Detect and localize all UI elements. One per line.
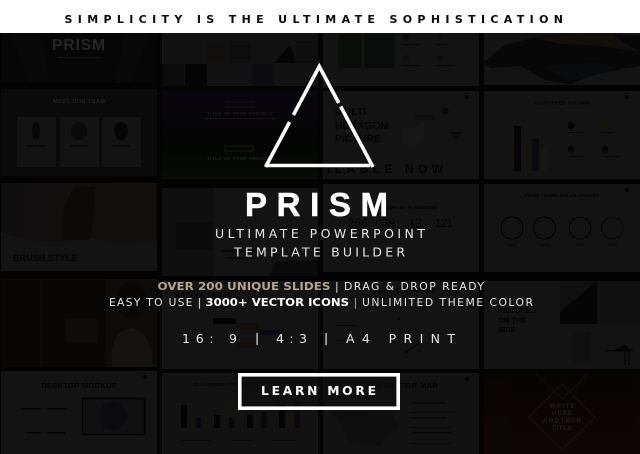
slide: matrix table xyxy=(162,281,318,369)
format options: 4:3 xyxy=(276,331,307,346)
slide: diamond title: HERE xyxy=(552,411,572,417)
slide: four years sales report: 2013 xyxy=(508,242,517,247)
slide: diamond title xyxy=(484,373,640,454)
slide: diamond title: TITLE xyxy=(552,426,572,432)
feature line 1 xyxy=(158,280,484,293)
slide: multi hexagon picture: PICTURE xyxy=(335,133,381,145)
slide: portrait photo xyxy=(1,279,157,367)
button: learn more: LEARN MORE xyxy=(261,384,376,398)
slide: multi hexagon picture: ILABLE NOW xyxy=(327,162,444,176)
feature line 1: OVER 200 UNIQUE SLIDES xyxy=(158,280,330,293)
slide: multi hexagon picture xyxy=(323,91,479,179)
slide: numbers xyxy=(323,184,479,272)
slide: matrix table: MATRIX TABLE xyxy=(174,292,233,299)
slide: pictures on the side: SIDE xyxy=(498,325,516,334)
slide: clustered column infographic: CLUSTERED COLUMN INFOGRAPHIC xyxy=(194,382,287,388)
slide: usa vector map: USA VECTOR MAP xyxy=(364,381,438,390)
slide: numbers: 256 xyxy=(348,218,368,230)
slide: prism cover xyxy=(1,33,157,83)
slide: meet our team xyxy=(1,89,157,176)
slide: night landscape xyxy=(162,91,318,179)
slide: four years sales report: 2016 xyxy=(608,242,618,247)
slide: four years sales report: 2014 xyxy=(540,242,550,247)
slide: diamond title: ANOTHER xyxy=(543,418,582,424)
slide: pictures on the side xyxy=(484,281,640,369)
slide: numbers: 39 xyxy=(382,218,395,230)
format options: 16: 9 xyxy=(182,331,237,346)
slide: prism cover: PRISM xyxy=(52,37,105,54)
slide: our latest works xyxy=(323,281,479,369)
slide: pictures on the side: PICTURES xyxy=(498,306,536,315)
slide: meet our team: MEET OUR TEAM xyxy=(53,99,105,105)
slide: night landscape: TITLE OF YOUR PROJECT xyxy=(207,156,273,161)
format options: A4 PRINT xyxy=(346,331,455,346)
slide: pictures and features xyxy=(323,33,479,86)
slide: numbers: 121 xyxy=(435,218,453,230)
feature line 2: | xyxy=(354,296,357,309)
panel: column 4 slide thumbnails xyxy=(484,33,640,454)
panel: column 2 slide thumbnails xyxy=(162,33,318,454)
slide: four years sales report: FOUR YEARS SALES REPORT xyxy=(524,193,600,199)
slide: desktop mockup xyxy=(1,371,157,454)
slide: brush style xyxy=(1,183,157,271)
slide: diamond title: WRITE xyxy=(550,404,574,410)
feature line 1: | xyxy=(335,280,339,293)
icon: prism triangle outline xyxy=(266,66,373,167)
format options xyxy=(182,331,455,346)
slide: clustered column: CLUSTERED COLUMN xyxy=(534,100,590,106)
subtitle: ultimate powerpoint template builder: TEMPLATE BUILDER xyxy=(233,244,405,260)
slide: keyboard photo layout xyxy=(162,188,318,276)
slide: brush stroke banner xyxy=(484,33,640,85)
slide: clustered column xyxy=(484,91,640,179)
top white banner xyxy=(0,0,640,33)
slide: multi hexagon picture: HEXAGON xyxy=(335,120,388,132)
feature line 2: 3000+ VECTOR ICONS xyxy=(206,296,349,309)
feature line 2 xyxy=(109,296,533,309)
slide: numbers: 12 xyxy=(409,218,422,230)
feature line 2: | xyxy=(198,296,201,309)
slide: four years sales report xyxy=(484,184,640,272)
slide: clustered column infographic xyxy=(162,373,318,454)
slide: desktop mockup: DESKTOP MOCKUP xyxy=(41,381,117,390)
slide: numbers: OUR COMPANY IN NUMBERS xyxy=(371,205,437,210)
subtitle: ultimate powerpoint template builder: ULTIMATE POWERPOINT xyxy=(215,226,425,241)
slide: night landscape: TITLE OF YOUR PROJECT xyxy=(207,111,273,116)
panel: column 1 slide thumbnails xyxy=(1,33,157,454)
feature line 2: UNLIMITED THEME COLOR xyxy=(362,296,533,309)
slide: our latest works: OUR LATEST WORKS xyxy=(367,289,435,295)
feature line 1: DRAG & DROP READY xyxy=(344,280,484,293)
banner tagline: SIMPLICITY IS THE ULTIMATE SOPHISTICATION xyxy=(64,13,563,26)
slide: usa vector map xyxy=(323,373,479,454)
feature line 2: EASY TO USE xyxy=(109,296,193,309)
slide: four years sales report: 2015 xyxy=(576,242,585,247)
panel: column 3 slide thumbnails xyxy=(323,33,479,454)
title: PRISM: PRISM xyxy=(245,186,388,223)
slide: image mosaic xyxy=(162,33,318,86)
subtitle: ultimate powerpoint template builder xyxy=(215,226,425,260)
slide: multi hexagon picture: MULTI xyxy=(335,106,366,118)
button: learn more xyxy=(240,375,398,408)
slide: pictures on the side: ON THE xyxy=(498,316,526,324)
slide: brush style: BRUSH STYLE xyxy=(13,253,77,263)
